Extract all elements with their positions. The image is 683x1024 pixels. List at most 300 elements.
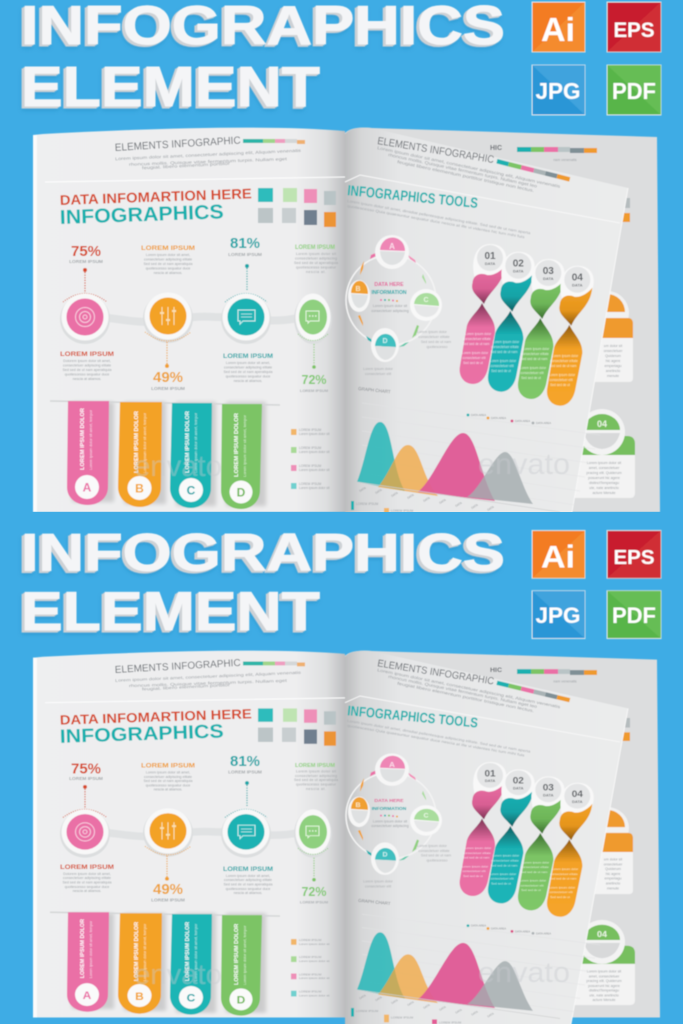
panel: left magazine page: [33, 128, 345, 512]
banner shadows: [72, 913, 266, 1013]
card 04: Lorem ipsum dolor sit: [587, 970, 621, 974]
card 04: acture Menute: [593, 998, 616, 1002]
connector band: [90, 832, 313, 837]
area chart: [351, 898, 600, 1024]
circle node: pink: [60, 809, 110, 858]
infographic heading: [60, 188, 252, 225]
ribbon 02: Lorem ipsum dolor: [490, 359, 517, 363]
colour swatches: [258, 708, 336, 746]
ribbon 02: consectetuer elit: [490, 877, 514, 881]
watermark: envato: [478, 448, 570, 481]
ribbon 04: Sed sed de ut: [550, 895, 570, 899]
stat: 75%: 75%: [71, 243, 101, 260]
side legend: LOREM IPSUM: [299, 482, 322, 486]
x axis labels: DATA: [358, 486, 367, 493]
x axis labels: DATA: [438, 1005, 447, 1012]
node C: C: [423, 813, 429, 819]
tilted page title: Lorem ipsum dolor sit amet, dimidiat pellentesque adipiscing elitate. Sed sed de ut nam aperta: [347, 199, 531, 235]
tilted page title: quotiescesso Quia quaesuntur sequatur duce nescia at ille vi videntes hic tum mihi fuis: [347, 724, 525, 758]
text block: orange lorem: quotiescesso sequatur duce: [146, 783, 190, 787]
ribbon 03: Lorem ipsum dolor: [523, 861, 549, 864]
watermark: envato: [134, 959, 222, 991]
tilted page heading: ELEMENTS INFOGRAPHIC: [377, 135, 495, 166]
ribbon 04: consectetuer elitate: [550, 359, 578, 363]
banner C: Lorem ipsum dolor sit amet, tempor: [194, 412, 198, 473]
tilted page title: [347, 183, 531, 239]
card 02: emperiagu: [605, 364, 621, 368]
ribbon 02: Lorem ipsum dolor: [493, 340, 520, 344]
text block: orange lorem: Lorem ipsum dolor sit amet,: [146, 771, 190, 774]
card 04: [573, 409, 635, 498]
side legend: LOREM IPSUM: [299, 428, 322, 432]
text block: orange lorem: consectetuer adipiscing elitate: [144, 775, 192, 779]
text block: teal lorem: Sed sed de ut nam aperatiquia: [224, 370, 272, 374]
stat: 81%: LOREM IPSUM: [228, 252, 262, 258]
ribbon 04: Lorem ipsum dolor: [549, 373, 576, 377]
card 04: amet, consectetuer: [589, 466, 620, 470]
tilted page title: quotiescesso Quia quaesuntur sequatur duce nescia at ille vi videntes hic tum mihi fuis: [347, 204, 525, 239]
text block: red lorem: Dolorem ipsum dolor sit amet,: [63, 359, 111, 363]
area: grey: [467, 452, 533, 504]
x axis labels: DATA: [438, 498, 447, 505]
stat: 75%: 75%: [71, 762, 101, 777]
text block: teal lorem: consectetuer adipiscing elitate: [224, 878, 272, 882]
text block: red lorem: consectetuer adipiscing elitate: [63, 364, 111, 368]
back page heading bar: [490, 667, 597, 684]
side notes: quotiescesso: [427, 345, 447, 349]
text block: green lorem: consectetuer adipiscing: [295, 256, 337, 260]
tilted page intro text: Lorem ipsum dolor sit amet, consectetuer adipiscing elit, Aliquam venenatis: [377, 145, 561, 189]
tilted page intro text: [377, 667, 561, 713]
back page heading bar: HIC: [490, 145, 502, 152]
side legend: Lorem ipsum dolor sit: [299, 959, 330, 963]
x axis labels: DATA: [470, 1010, 479, 1016]
side legend: Lorem ipsum dolor sit: [299, 976, 330, 980]
banner shadows: [72, 402, 266, 506]
diagram centre label: INFORMATION: [372, 290, 407, 296]
text block: green lorem: LOREM IPSUM: [295, 245, 335, 251]
x axis labels: [358, 486, 495, 512]
ribbon 01: Sed sed de ut: [463, 874, 483, 878]
node B: B: [355, 286, 361, 293]
card 04: posuerunt hic agere: [588, 984, 620, 988]
text block: teal lorem: LOREM IPSUM: [223, 866, 273, 873]
area: orange: [378, 954, 438, 1003]
text block: green lorem: quotiescesso sequatur: [296, 783, 337, 786]
banner C: C: [187, 992, 196, 1005]
back page heading bar: [490, 145, 597, 162]
banner C: LOREM IPSUM DOLOR: [185, 922, 191, 981]
card 04: Lorem ipsum dolor sit: [587, 461, 621, 465]
bottom legend: LOREM IPSUM: [391, 1016, 414, 1019]
card 02: um dolor sit: [604, 344, 622, 348]
card 02: hic agere: [606, 359, 620, 363]
diagram centre label: [371, 282, 409, 313]
tilted page heading: [377, 135, 570, 182]
card 02: um dolor sit: [604, 858, 622, 862]
ribbon 03: consectetuer elitate: [521, 865, 549, 869]
x axis labels: DATA: [486, 1012, 495, 1018]
x axis labels: DATA: [390, 491, 399, 498]
banner A: LOREM IPSUM DOLOR: [80, 408, 86, 470]
card 02: onsectetuer: [604, 349, 623, 353]
banner B: [118, 402, 162, 507]
side notes: consectetuer elit: [365, 884, 391, 888]
ribbon 02: Sed sed de ut: [491, 882, 511, 885]
card 02: menute: [607, 886, 619, 890]
ribbon 02: consectetuer elit: [490, 364, 514, 368]
back page heading bar: nam venenatis: [553, 680, 577, 684]
ribbon 02: consectetuer elitate: [491, 345, 519, 349]
infographic heading: INFOGRAPHICS: [59, 201, 224, 229]
title: INFOGRAPHICS: [21, 524, 505, 582]
ribbon 01: Lorem ipsum dolor: [462, 351, 489, 355]
ribbon 01: Sed sed de ut nam: [463, 342, 490, 346]
card 02: onsectetuer: [604, 862, 623, 866]
area chart: GRAPH CHART: [358, 898, 391, 906]
panel: lower promo block: [21, 524, 661, 1024]
bottom legend: LOREM IPSUM: [391, 509, 414, 513]
circle node: pink: [60, 294, 110, 344]
ribbon 04: Lorem ipsum dolor: [552, 867, 578, 871]
text block: teal lorem: Sed sed de ut nam aperatiquia: [224, 883, 273, 886]
panel: tilted right page: [345, 651, 628, 1024]
x axis labels: DATA: [422, 496, 431, 503]
tilted page title: [347, 703, 531, 758]
ribbon 04: Lorem ipsum dolor: [549, 885, 575, 889]
chart legend: DATA AREA: [491, 927, 506, 930]
tilted page intro text: Lorem ipsum dolor sit amet, consectetuer adipiscing elit, Aliquam venenatis: [377, 667, 561, 709]
watermark: envato: [134, 450, 222, 483]
ribbon 03: Lorem ipsum dolor: [523, 347, 550, 351]
icon: EPS format: EPS: [614, 19, 654, 42]
ribbon 01: Lorem ipsum dolor: [465, 332, 492, 336]
infographic heading: DATA INFOMARTION HERE: [60, 185, 252, 208]
text block: red lorem: quotiescesso sequatur duce: [65, 885, 109, 889]
node A: [375, 753, 409, 786]
page intro text: feugiat. libero elementum porttitor: [142, 682, 231, 691]
banner A: LOREM IPSUM DOLOR: [80, 919, 86, 978]
icon: EPS format: EPS: [614, 546, 654, 569]
x axis labels: DATA: [454, 1008, 463, 1015]
text block: green lorem: [294, 763, 338, 791]
text block: red lorem: [60, 864, 114, 893]
x axis labels: DATA: [406, 1000, 415, 1007]
text block: orange lorem: Lorem ipsum dolor sit amet,: [146, 253, 190, 257]
card 02: emperiagu: [605, 877, 622, 881]
ribbon 04: Lorem ipsum dolor: [552, 354, 579, 358]
icon: Ai format: [532, 530, 585, 578]
node D: D: [382, 338, 388, 345]
card 02: menute: [607, 374, 619, 378]
ribbon 01: Lorem ipsum dolor: [462, 864, 488, 868]
ribbon 01: 01: [484, 251, 496, 262]
text block: orange lorem: consectetuer adipiscing elitate: [144, 258, 192, 262]
ribbon 03: consectetuer elitate: [521, 352, 549, 356]
side legend: [291, 428, 330, 490]
stat: 49%: [145, 846, 191, 903]
side notes: Sed sed de ut nam: [421, 854, 451, 858]
side notes: consectetuer elit: [365, 372, 391, 376]
card 04: [573, 920, 635, 1005]
card 04: pracing elit. Quiderum: [586, 471, 622, 475]
stat: 72%: LOREM IPSUM: [300, 900, 328, 905]
diagram centre label: Lorem ipsum dolor sit: [373, 304, 407, 308]
area: pink: [418, 433, 495, 501]
card 04: distinctTemperiagu: [589, 481, 619, 485]
stat: 81%: [225, 754, 267, 818]
infographic heading: [59, 707, 252, 748]
banner D: LOREM IPSUM DOLOR: [234, 413, 240, 477]
stat: 75%: LOREM IPSUM: [69, 776, 103, 781]
ribbon 03: DATA: [543, 276, 554, 281]
ribbon 03: 03: [543, 266, 554, 277]
banner B: LOREM IPSUM DOLOR: [134, 411, 140, 473]
x axis labels: DATA: [358, 993, 367, 1000]
stat: 72%: LOREM IPSUM: [300, 388, 329, 393]
ribbon 04: 04: [572, 789, 583, 800]
colour swatches: [258, 188, 336, 227]
stat: 72%: 72%: [302, 884, 327, 899]
x axis labels: DATA: [374, 488, 383, 495]
side legend: Lorem ipsum dolor sit: [299, 994, 330, 997]
circle node: teal: [221, 294, 271, 344]
text block: green lorem: Lorem ipsum dolor sit: [296, 252, 336, 256]
icon: JPG format: JPG: [536, 604, 581, 628]
ribbon 02: DATA: [513, 269, 524, 274]
side legend: LOREM IPSUM: [299, 955, 322, 959]
page intro text: [115, 670, 301, 691]
ribbon 04: 04: [572, 273, 583, 284]
side notes: consectetuer elitate: [418, 335, 450, 339]
card 02: anetincto: [606, 882, 620, 885]
ribbon 02: DATA: [513, 786, 524, 790]
banner A: Lorem ipsum dolor sit amet, tempor: [89, 409, 93, 470]
card 04: ute, nate anetincto: [589, 486, 619, 490]
ribbon 04: [547, 783, 594, 917]
banner A: A: [83, 989, 92, 1002]
stat: 49%: 49%: [153, 882, 183, 898]
stat: 81%: 81%: [230, 754, 260, 770]
icon: Ai format: [532, 2, 585, 52]
card 04: amet, consectetuer: [589, 974, 620, 978]
stat: 49%: 49%: [153, 369, 183, 386]
side notes: [363, 330, 451, 376]
text block: teal lorem: [223, 353, 274, 383]
circle node: green: [294, 809, 332, 858]
side legend: LOREM IPSUM: [299, 464, 322, 468]
icon: PDF format: [607, 65, 661, 115]
diagram centre label: [371, 798, 409, 828]
banner A: Lorem ipsum dolor sit amet, tempor: [89, 920, 93, 978]
ribbon 04: DATA: [572, 799, 583, 804]
node C: C: [423, 297, 429, 304]
chart legend: DATA AREA: [471, 924, 486, 928]
area: teal: [357, 932, 405, 998]
banner B: B: [135, 990, 144, 1003]
ribbon 04: Sed sed de ut nam: [550, 877, 577, 881]
title: [21, 524, 505, 642]
tilted page title: INFOGRAPHICS TOOLS: [347, 703, 479, 731]
area: orange: [378, 445, 438, 496]
banner D: [221, 915, 262, 1016]
x axis labels: DATA: [470, 503, 479, 510]
ribbon 03: consectetuer elit: [520, 883, 544, 887]
circular diagram: [346, 235, 594, 406]
panel: upper promo block: [21, 0, 661, 535]
text block: red lorem: [60, 351, 115, 381]
infographic heading: INFOGRAPHICS: [59, 721, 224, 748]
banner C: [170, 914, 212, 1015]
circle node: teal: [221, 809, 271, 858]
x axis labels: DATA: [454, 501, 463, 508]
ribbon 02: consectetuer elitate: [491, 859, 519, 863]
banner B: LOREM IPSUM DOLOR: [134, 922, 140, 981]
ribbon 03: 03: [543, 783, 554, 794]
side legend: Lorem ipsum dolor sit: [299, 432, 330, 436]
stat: 81%: 81%: [230, 235, 260, 252]
text block: orange lorem: Sed sed de ut nam aperatiquia: [144, 779, 193, 783]
side legend: Lorem ipsum dolor sit: [299, 450, 330, 454]
banner B: B: [135, 482, 144, 496]
chart legend: DATA AREA: [471, 413, 486, 417]
text block: teal lorem: [223, 866, 273, 895]
tilted page intro text: [377, 145, 561, 193]
ribbon 03: consectetuer elit: [520, 371, 544, 375]
ribbon 01: [460, 762, 506, 896]
text block: red lorem: Dolorem ipsum dolor sit amet,: [63, 872, 111, 876]
text block: red lorem: consectetuer adipiscing elitate: [63, 876, 111, 880]
icon: JPG format: JPG: [536, 78, 580, 104]
tilted page intro text: rhoncus mollis. Quisque vitae fermentum turpis. Nullam eget leo: [388, 152, 538, 189]
node B: [348, 280, 370, 312]
bottom legend: LOREM IPSUM: [356, 1009, 379, 1013]
page heading: ELEMENTS INFOGRAPHIC: [115, 658, 242, 676]
x axis labels: DATA: [406, 493, 415, 500]
ribbon 02: [488, 252, 535, 392]
circle node: green: [294, 294, 332, 344]
page intro text: Lorem ipsum dolor sit amet, consectetuer adipiscing elit, Aliquam venenatis: [115, 148, 301, 161]
ribbon 01: 01: [484, 769, 496, 779]
side notes: Lorem ipsum dolor: [417, 844, 448, 848]
text block: orange lorem: quotiescesso sequatur duce: [146, 266, 190, 270]
ribbon 01: [460, 244, 506, 384]
stat: 72%: [298, 848, 328, 905]
banner A: [67, 912, 109, 1012]
ribbon 01: DATA: [485, 778, 495, 783]
text block: teal lorem: quotiescesso sequatur duce: [226, 374, 270, 378]
side notes: [363, 844, 451, 888]
side notes: Sed sed de ut nam: [421, 340, 451, 344]
card 02: [595, 292, 634, 382]
back page heading bar: nam venenatis: [553, 158, 577, 162]
text block: green lorem: Sed sed de ut aperatiquia: [294, 778, 338, 782]
circle node: orange: [143, 292, 193, 343]
area: pink: [418, 943, 495, 1008]
bottom legend: [351, 501, 462, 518]
bottom legend: LOREM IPSUM: [439, 514, 462, 518]
banner D: Lorem ipsum dolor sit amet, tempor: [243, 925, 247, 985]
panel: left magazine page: [33, 651, 345, 1018]
ribbon 04: Sed sed de ut: [550, 383, 570, 387]
x axis labels: DATA: [390, 998, 399, 1005]
side notes: Lorem ipsum dolor: [363, 880, 394, 884]
side legend: Lorem ipsum dolor sit: [299, 468, 330, 472]
ribbon 04: Sed sed de ut nam: [550, 364, 577, 368]
text block: red lorem: LOREM IPSUM: [60, 351, 115, 358]
side notes: Lorem ipsum dolor: [363, 367, 394, 371]
page intro text: feugiat. libero elementum porttitor: [142, 161, 231, 170]
banner B: Lorem ipsum dolor sit amet, tempor: [143, 923, 147, 981]
icon: EPS format: [607, 530, 661, 578]
page intro text: Lorem ipsum dolor sit amet, consectetuer adipiscing elit, Aliquam venenatis: [115, 670, 301, 683]
node A: [375, 235, 409, 269]
text block: red lorem: nescia at aliamos.: [73, 889, 101, 893]
card 04: acture Menute: [593, 491, 615, 495]
card 04: ute, nate anetincto: [589, 994, 619, 997]
chart legend: DATA AREA: [515, 929, 530, 933]
chart legend: [467, 413, 551, 425]
chart legend: DATA AREA: [491, 416, 506, 420]
tilted page title: INFOGRAPHICS TOOLS: [347, 183, 479, 212]
ribbon 02: 02: [513, 776, 524, 787]
back page swatches: [622, 718, 630, 741]
ribbon 01: Lorem ipsum dolor: [465, 846, 491, 850]
card 02: Quiderum: [605, 867, 621, 871]
side legend: [291, 938, 330, 997]
stat: 81%: [225, 235, 267, 302]
stat: 49%: LOREM IPSUM: [151, 386, 185, 392]
text block: orange lorem: [141, 763, 195, 792]
title: ELEMENT: [21, 55, 320, 119]
banner D: Lorem ipsum dolor sit amet, tempor: [243, 414, 247, 477]
page heading: [115, 658, 305, 676]
x axis labels: [358, 993, 495, 1018]
text block: green lorem: nescia at.: [306, 787, 326, 791]
tilted page intro text: feugiat libero elementum porttitor tristique non lectus.: [397, 681, 535, 713]
side notes: quotiescesso: [427, 859, 448, 863]
side notes: Lorem ipsum dolor: [417, 330, 448, 334]
icon: PDF format: [607, 591, 661, 639]
text block: red lorem: Sed sed de ut nam aperatiquia: [63, 368, 111, 372]
node A: A: [389, 242, 395, 251]
stat: 75%: [63, 243, 107, 302]
side legend: Lorem ipsum dolor sit: [299, 942, 330, 946]
side legend: LOREM IPSUM: [299, 990, 322, 994]
ribbon 03: Sed sed de ut: [521, 888, 541, 892]
chart legend: DATA AREA: [515, 419, 530, 423]
card 04: posuerunt hic agere: [588, 476, 620, 480]
ribbon 02: [488, 769, 535, 903]
stat: 75%: [63, 762, 107, 818]
ribbon 04: consectetuer elitate: [550, 872, 578, 876]
ribbon 04: [547, 266, 594, 406]
card 02: [585, 807, 633, 894]
tilted page heading: [377, 659, 570, 702]
text block: red lorem: nescia at aliamos.: [73, 377, 101, 381]
node B: B: [355, 802, 361, 809]
tilted page heading: ELEMENTS INFOGRAPHIC: [377, 659, 495, 688]
ribbon 02: Sed sed de ut nam: [491, 863, 518, 867]
icon: EPS format: [607, 2, 661, 52]
title: ELEMENT: [21, 581, 320, 642]
text block: red lorem: Sed sed de ut nam aperatiquia: [63, 881, 112, 885]
connector band: [90, 317, 313, 322]
banner B: Lorem ipsum dolor sit amet, tempor: [143, 412, 147, 473]
diagram centre label: consectetuer adipiscing: [371, 309, 409, 313]
tilted page title: Lorem ipsum dolor sit amet, dimidiat pellentesque adipiscing elitate. Sed sed de ut nam aperta: [347, 719, 531, 754]
node D: D: [382, 852, 388, 859]
